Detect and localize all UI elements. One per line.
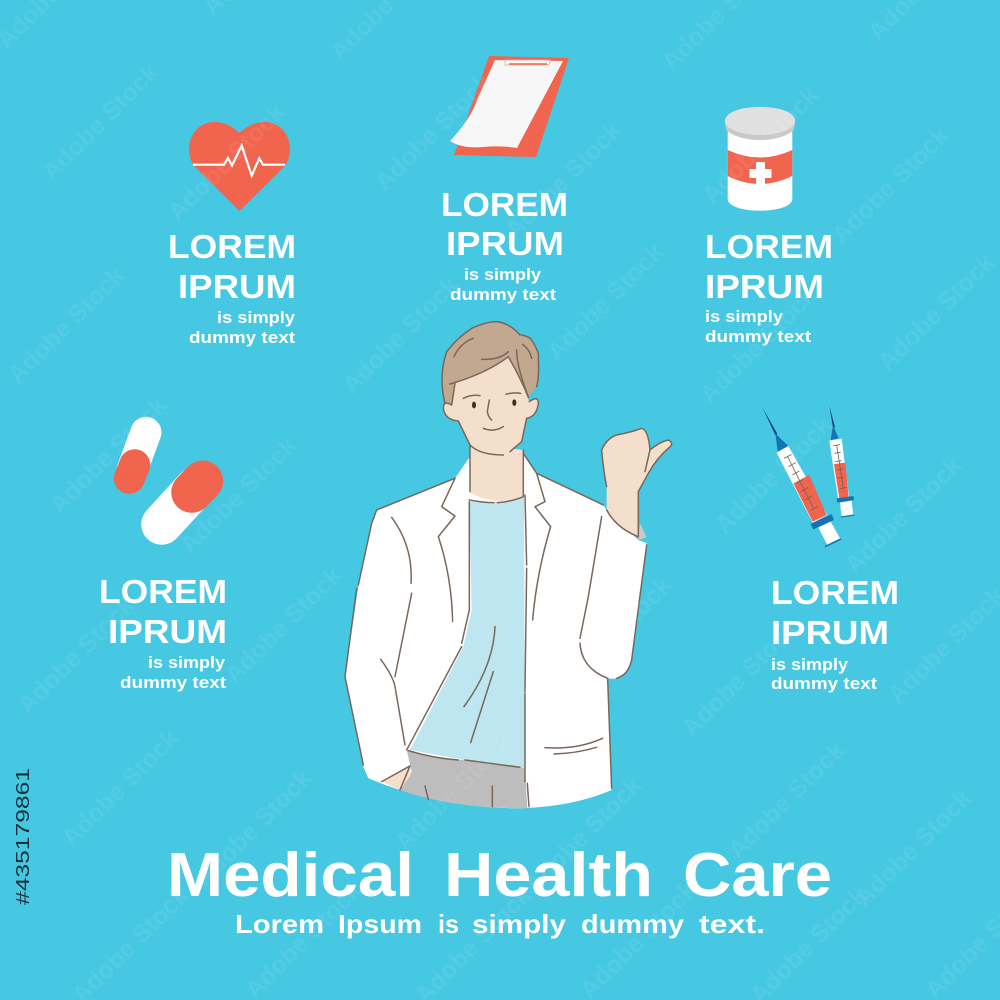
icon: clipboard: [450, 56, 569, 157]
title: [167, 841, 832, 910]
subtitle: simply: [472, 909, 567, 939]
text: Adobe Stock: [696, 81, 824, 209]
text: Adobe Stock: [162, 98, 290, 226]
text: Adobe Stock: [709, 411, 837, 539]
text block: pills: LOREM: [99, 573, 227, 610]
title: Health: [444, 841, 653, 910]
text block: clipboard: is simply: [464, 266, 542, 284]
subtitle: dummy: [581, 909, 685, 939]
stock id: #435179861: [13, 768, 33, 905]
text: Adobe Stock: [849, 784, 977, 912]
text block: heart: is simply: [217, 309, 296, 327]
text block: pills: [99, 573, 227, 692]
text block: syringes: dummy text: [771, 675, 878, 693]
text block: heart: IPRUM: [178, 268, 296, 305]
text block: bottle: dummy text: [705, 328, 812, 346]
text block: bottle: IPRUM: [705, 268, 824, 305]
subtitle: is: [438, 909, 459, 939]
text: Adobe Stock: [389, 728, 517, 856]
text block: syringes: LOREM: [771, 574, 899, 611]
icon: pills: [129, 432, 203, 524]
icon: syringes: [762, 406, 854, 547]
text block: syringes: IPRUM: [771, 614, 889, 651]
doctor: trousers: [400, 750, 527, 808]
text: Adobe Stock: [56, 724, 184, 852]
doctor: neck: [470, 443, 523, 501]
text block: heart: dummy text: [189, 329, 296, 347]
icon: heart with pulse line: [189, 122, 290, 211]
doctor: cuff: [638, 523, 647, 540]
text block: heart: LOREM: [168, 228, 296, 265]
text block: syringes: [771, 574, 899, 693]
text block: heart: [168, 228, 296, 347]
text block: pills: IPRUM: [108, 613, 227, 650]
text block: clipboard: [441, 186, 568, 304]
text: Adobe Stock: [336, 271, 464, 399]
text: Adobe Stock: [694, 281, 822, 409]
text: Adobe Stock: [189, 764, 317, 892]
text block: pills: is simply: [148, 654, 226, 672]
figure: doctor giving thumbs gesture: [345, 322, 672, 808]
doctor: coat: [345, 453, 647, 808]
text: Adobe Stock: [12, 591, 140, 719]
text: Adobe Stock: [826, 121, 954, 249]
doctor: outlines: [345, 322, 672, 807]
text block: bottle: is simply: [705, 308, 784, 326]
text: Adobe Stock: [344, 604, 472, 732]
doctor: raised hand: [602, 428, 672, 537]
text: Adobe Stock: [369, 68, 497, 196]
subtitle: Ipsum: [338, 909, 422, 939]
text: Adobe Stock: [44, 391, 172, 519]
text block: clipboard: dummy text: [450, 286, 557, 304]
text block: bottle: LOREM: [705, 228, 833, 265]
subtitle: [235, 909, 765, 939]
text block: syringes: is simply: [771, 656, 849, 674]
doctor: t-shirt: [410, 497, 525, 768]
text: Adobe Stock: [676, 614, 804, 742]
text block: bottle: [705, 228, 833, 346]
text: Adobe Stock: [722, 736, 850, 864]
subtitle: Lorem: [235, 909, 324, 939]
doctor: hair: [442, 322, 539, 405]
text: Adobe Stock: [839, 451, 967, 579]
subtitle: text.: [699, 909, 765, 939]
text block: clipboard: IPRUM: [446, 225, 564, 262]
text: Adobe Stock: [174, 431, 302, 559]
doctor: face: [443, 357, 538, 455]
icon: medicine bottle: [725, 107, 795, 211]
title: Care: [683, 841, 832, 910]
text block: pills: dummy text: [120, 674, 227, 692]
doctor: pocket hand: [382, 766, 411, 790]
text: Adobe Stock: [2, 261, 130, 389]
text: Adobe Stock: [499, 116, 627, 244]
doctor: eyes: [472, 399, 516, 408]
text block: clipboard: LOREM: [441, 186, 568, 223]
text: Adobe Stock: [872, 248, 1000, 376]
text: Adobe Stock: [219, 561, 347, 689]
text: Adobe Stock: [36, 58, 164, 186]
text: Adobe Stock: [541, 238, 669, 366]
title: Medical: [167, 841, 414, 910]
text: Adobe Stock: [549, 571, 677, 699]
text: Adobe Stock: [519, 771, 647, 899]
